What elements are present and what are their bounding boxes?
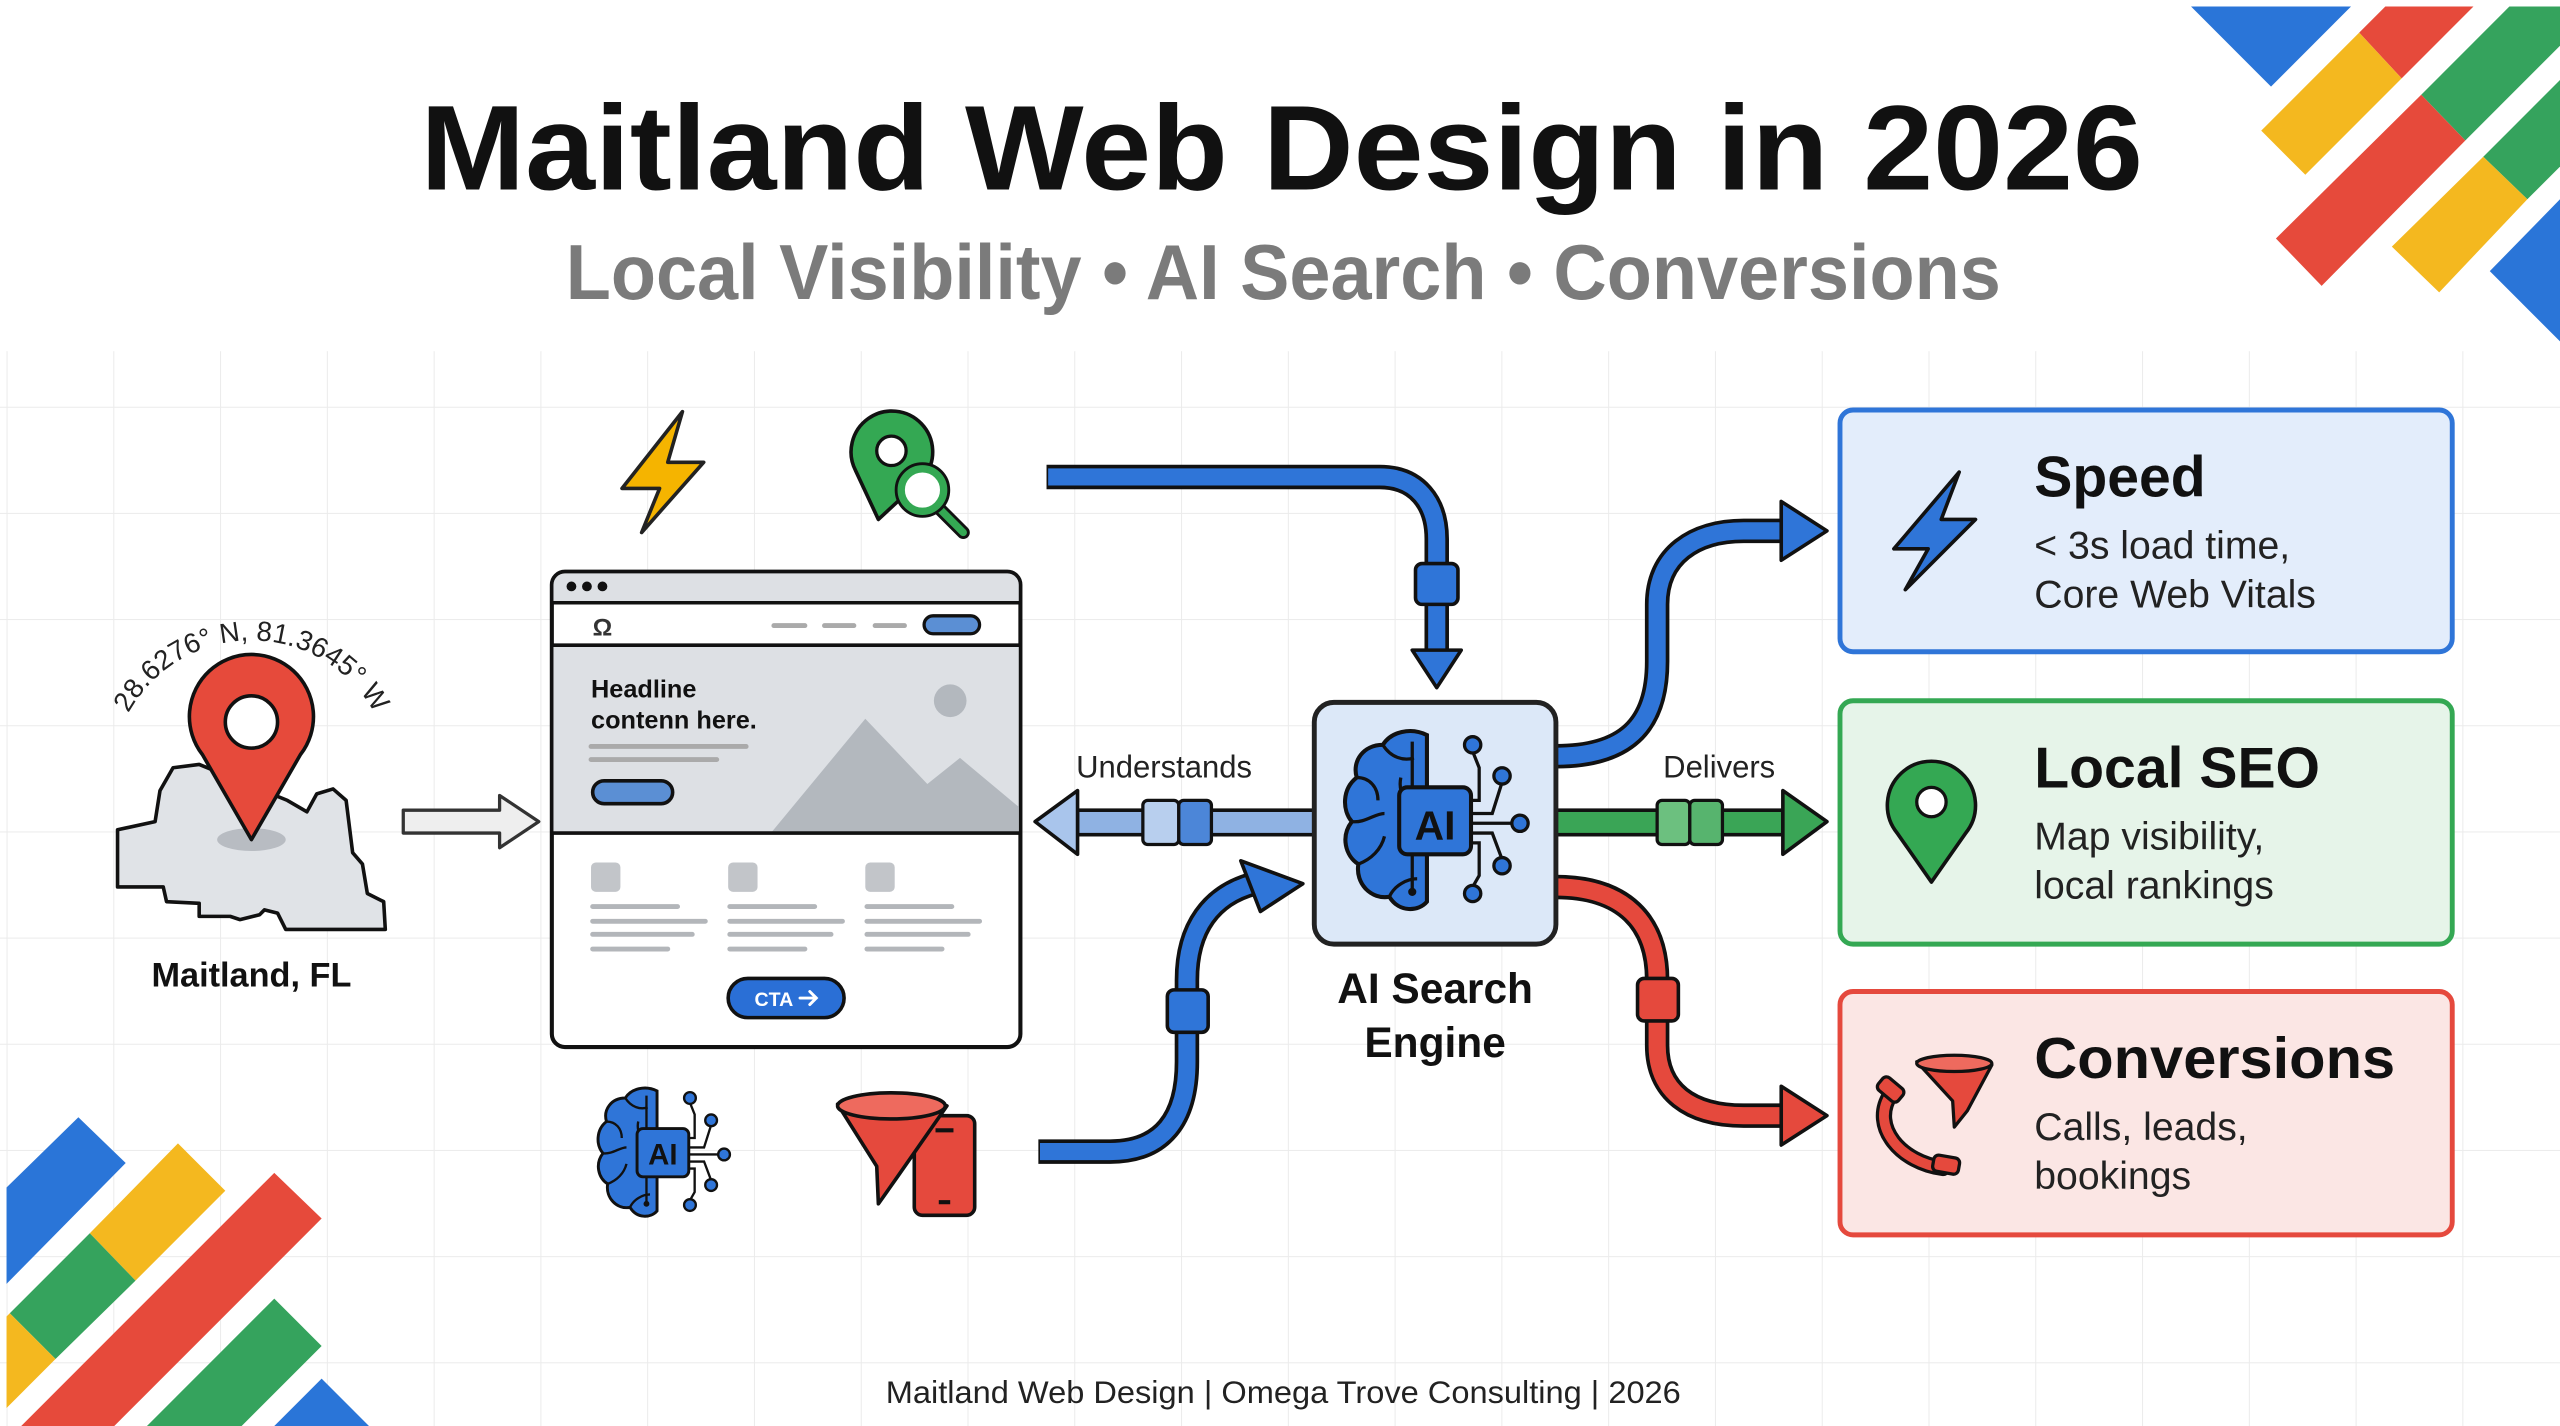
icon: funnel and phone xyxy=(838,1093,975,1215)
card: speed: Speed xyxy=(2034,446,2206,510)
coordinates label: 28.6276° N, 81.3645° W xyxy=(114,622,391,712)
map label: Maitland, FL xyxy=(151,957,351,995)
AI search engine box xyxy=(1314,702,1556,944)
label: AI search engine: AI Search xyxy=(1337,965,1533,1012)
pipe: speed xyxy=(1554,501,1827,756)
card: conversions: Conversions xyxy=(2034,1027,2395,1091)
subtitle: Local Visibility • AI Search • Conversions xyxy=(566,228,2001,316)
card: conversions xyxy=(1840,992,2452,1235)
pipe: bottom into engine xyxy=(1038,861,1303,1152)
card: local SEO: Local SEO xyxy=(2034,736,2320,800)
arrow: delivers xyxy=(1554,791,1827,854)
icon: yellow lightning xyxy=(622,412,704,533)
card: local SEO: local rankings xyxy=(2034,864,2274,907)
icon: blue lightning xyxy=(1894,472,1976,590)
card: speed: Core Web Vitals xyxy=(2034,574,2316,617)
red pin xyxy=(189,654,313,840)
label: understands: Understands xyxy=(1076,750,1252,785)
decoration: top-right stripes xyxy=(2191,7,2560,341)
website mockup: contenn here. xyxy=(591,707,757,735)
icon: green pin xyxy=(1887,761,1976,882)
website mockup xyxy=(552,572,1020,1047)
CTA button xyxy=(728,978,844,1018)
hero xyxy=(553,645,1019,833)
arrow: understands xyxy=(1035,791,1316,854)
card: local SEO xyxy=(1840,701,2452,944)
decoration: bottom-left stripes xyxy=(7,1117,369,1426)
card: conversions: Calls, leads, xyxy=(2034,1106,2248,1149)
label: delivers: Delivers xyxy=(1663,750,1775,785)
background grid xyxy=(0,351,2560,1426)
AI search engine box: AI xyxy=(1415,803,1456,849)
icon: AI brain xyxy=(598,1088,730,1216)
website mockup: Ω xyxy=(593,614,612,641)
pipe: conversions xyxy=(1554,887,1827,1145)
card: conversions: bookings xyxy=(2034,1155,2191,1198)
icon: phone and funnel xyxy=(1875,1055,1992,1175)
website mockup: CTA xyxy=(754,989,793,1011)
map outline xyxy=(118,764,385,929)
card: speed: < 3s load time, xyxy=(2034,525,2290,568)
card: speed xyxy=(1840,410,2452,652)
feature columns xyxy=(591,862,620,892)
pipe: top into engine xyxy=(1047,477,1461,688)
title: Maitland Web Design in 2026 xyxy=(420,80,2143,215)
hollow arrow xyxy=(403,795,539,848)
website mockup: Headline xyxy=(591,675,696,703)
location map with pin xyxy=(114,622,391,932)
icon: green pin with magnifier xyxy=(851,411,963,533)
card: local SEO: Map visibility, xyxy=(2034,815,2264,858)
footer: Maitland Web Design | Omega Trove Consulting | 2026 xyxy=(886,1375,1681,1410)
icon: AI brain: AI xyxy=(648,1139,678,1172)
label: AI search engine: Engine xyxy=(1364,1019,1506,1066)
